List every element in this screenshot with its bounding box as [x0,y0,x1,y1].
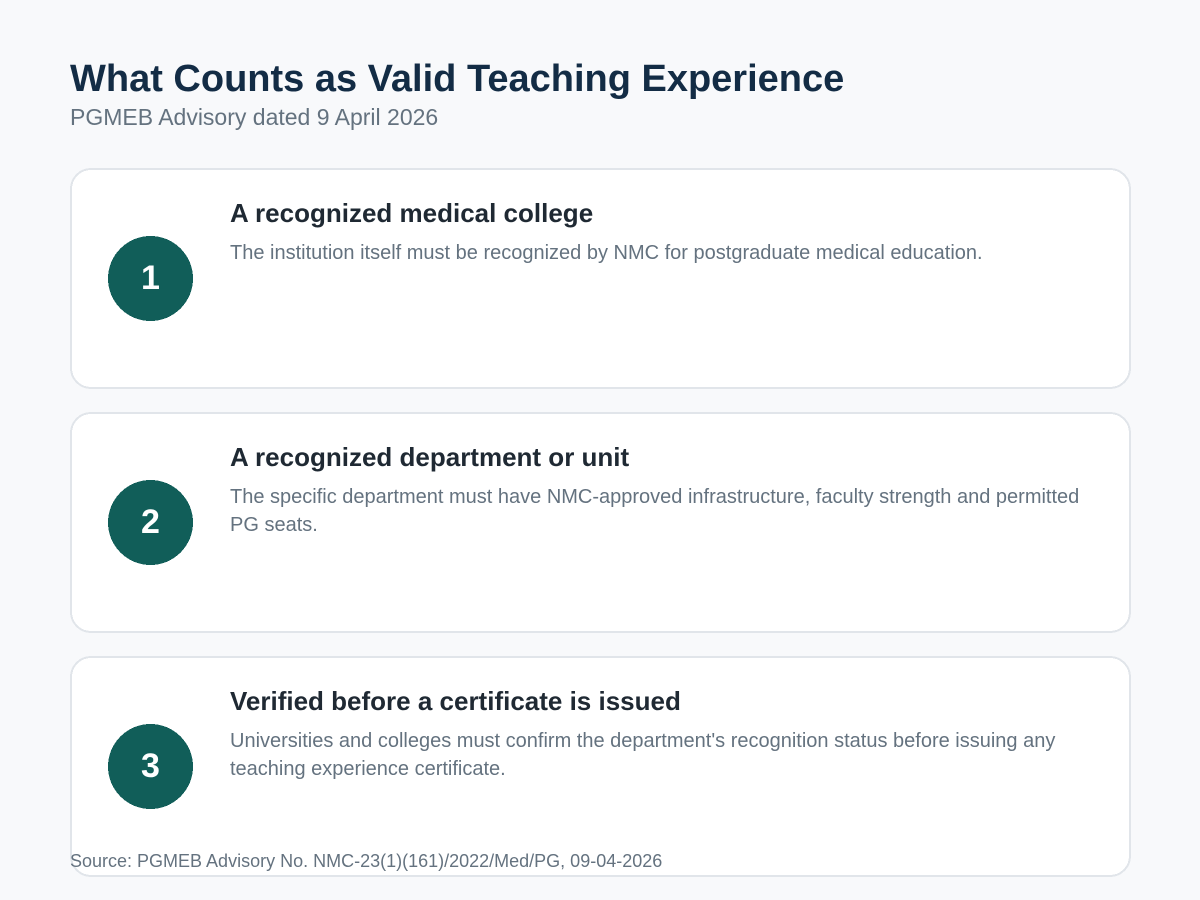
card 2 text: PG seats. [230,514,318,536]
source footnote: Source: PGMEB Advisory No. NMC-23(1)(161)/2022/Med/PG, 09-04-2026 [70,851,662,871]
subtitle: PGMEB Advisory dated 9 April 2026 [70,104,438,130]
card 2 heading: A recognized department or unit [230,442,630,472]
icon: number 1 [108,236,193,321]
card 3 text [230,730,1055,780]
card 3 heading: Verified before a certificate is issued [230,686,681,716]
title: What Counts as Valid Teaching Experience [70,58,844,100]
panel: card 1 [71,169,1130,388]
card 2 text: The specific department must have NMC-approved infrastructure, faculty strength and permitted [230,486,1079,508]
icon: number 1: 1 [141,259,160,297]
icon: number 3 [108,724,193,809]
icon: number 3: 3 [141,747,160,785]
card 3 text: teaching experience certificate. [230,758,506,780]
card 3 text: Universities and colleges must confirm the department's recognition status before issuing any [230,730,1055,752]
panel: card 2 [71,413,1130,632]
card 1 heading: A recognized medical college [230,198,593,228]
card 2 text [230,486,1079,536]
icon: number 2: 2 [141,503,160,541]
card 1 text: The institution itself must be recognized by NMC for postgraduate medical education. [230,242,983,264]
icon: number 2 [108,480,193,565]
panel: card 3 [71,657,1130,876]
